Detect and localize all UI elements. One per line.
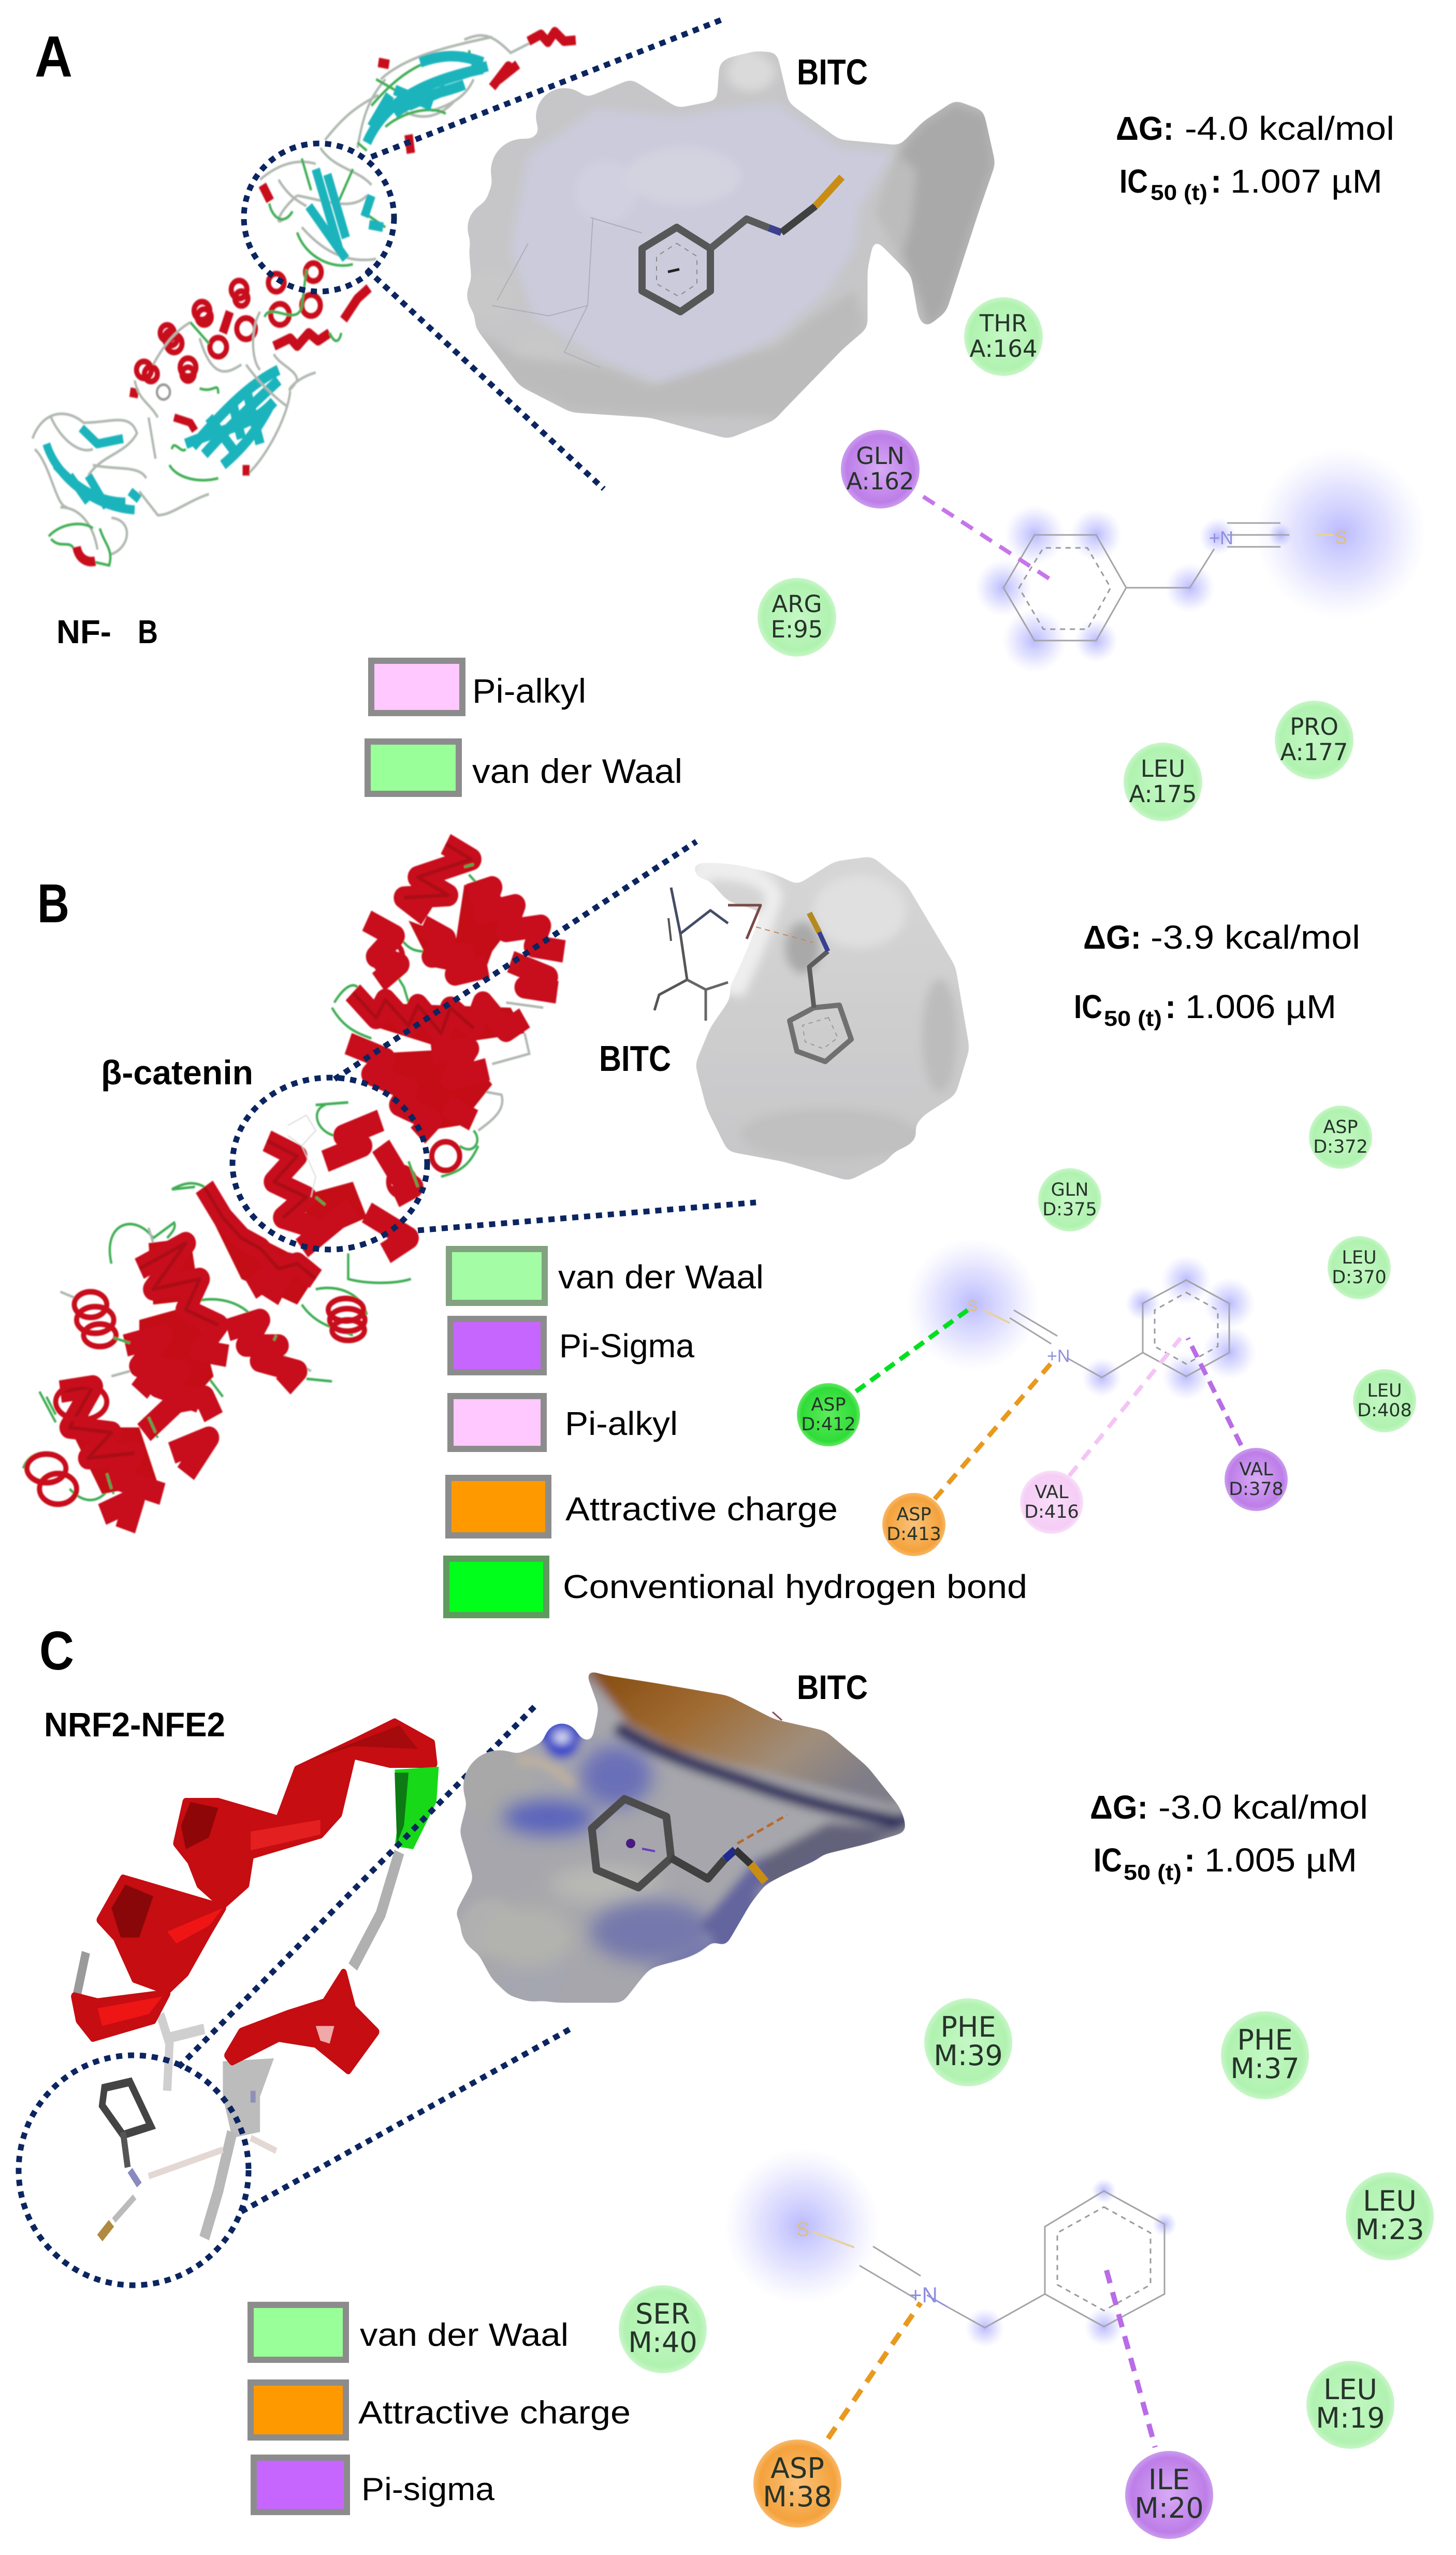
residue LEU M:19: M:19	[1316, 2402, 1385, 2434]
2D ligand interaction diagram	[856, 1238, 1256, 1499]
2D ligand interaction diagram: +N	[1209, 527, 1233, 548]
ligand BITC stick in pocket	[592, 1712, 787, 1888]
residue VAL D:416	[1020, 1471, 1083, 1534]
residue PRO A:177	[1275, 701, 1353, 779]
residue PRO A:177: A:177	[1280, 738, 1348, 766]
residue GLN D:375: D:375	[1042, 1199, 1097, 1220]
residue SER M:40: M:40	[628, 2326, 697, 2359]
residue ASP D:412: D:412	[801, 1414, 856, 1435]
2D ligand interaction diagram: S	[796, 2219, 809, 2241]
legend: Pi-Sigma: Pi-Sigma	[559, 1327, 694, 1364]
residue LEU D:370: LEU	[1342, 1247, 1377, 1268]
residue VAL D:378: VAL	[1239, 1459, 1273, 1480]
label beta-catenin: β-catenin	[101, 1053, 253, 1092]
label NF-kB: NF-	[56, 613, 111, 650]
residue PRO A:177: PRO	[1290, 713, 1338, 741]
protein: NF-kB ribbon structure	[33, 32, 576, 565]
IC50 label: 50 (t)	[1151, 180, 1207, 205]
zoom guide line lower	[367, 269, 604, 489]
binding energy label: -4.0 kcal/mol	[1185, 110, 1394, 147]
zoom guide line lower	[241, 2027, 573, 2212]
dashed zoom circle	[19, 2055, 249, 2285]
panel letter B: B	[37, 873, 69, 934]
legend: van der Waal	[449, 1249, 764, 1303]
residue THR A:164	[964, 297, 1043, 376]
legend: van der Waal: van der Waal	[360, 2317, 569, 2353]
legend: Pi-alkyl: Pi-alkyl	[565, 1405, 678, 1442]
residue ASP M:38: M:38	[763, 2480, 832, 2513]
residue SER M:40: SER	[635, 2298, 690, 2330]
panel C: NRF2-NFE2 docking	[19, 1620, 1434, 2539]
zoom guide line lower	[418, 1202, 756, 1230]
binding energy label: ΔG:	[1083, 919, 1141, 956]
IC50 label: :	[1184, 1841, 1195, 1879]
panel letter A: A	[35, 24, 72, 89]
zoom guide line upper	[334, 841, 696, 1079]
residue GLN A:162	[841, 430, 920, 509]
binding energy label	[1116, 110, 1394, 147]
residue LEU M:19: LEU	[1323, 2373, 1377, 2406]
label BITC: BITC	[797, 52, 868, 92]
residue LEU D:408: D:408	[1357, 1400, 1412, 1421]
residue ASP D:413: D:413	[886, 1524, 941, 1545]
residue GLN A:162: GLN	[856, 442, 905, 470]
residue LEU D:408	[1353, 1369, 1416, 1432]
IC50 label: 50 (t)	[1124, 1860, 1182, 1884]
IC50 label	[1074, 988, 1336, 1030]
IC50 label: 50 (t)	[1104, 1006, 1162, 1030]
2D ligand interaction diagram	[923, 448, 1426, 673]
2D ligand interaction diagram: S	[1335, 527, 1347, 548]
residue ARG E:95: E:95	[771, 616, 823, 643]
label NF-kB: B	[138, 613, 158, 650]
residue GLN D:375	[1038, 1168, 1101, 1231]
binding energy label: -3.0 kcal/mol	[1158, 1789, 1368, 1826]
legend: Pi-sigma	[254, 2458, 495, 2512]
legend: Attractive charge: Attractive charge	[565, 1490, 838, 1528]
dashed zoom circle	[244, 143, 394, 292]
panel A: NF-kB docking	[33, 19, 1426, 821]
residue ASP D:413: ASP	[896, 1504, 931, 1525]
residue LEU A:175: LEU	[1141, 755, 1185, 782]
residue ASP D:413	[882, 1493, 945, 1556]
residue VAL D:416: VAL	[1035, 1482, 1069, 1503]
IC50 label: :	[1165, 988, 1176, 1025]
residue GLN A:162: A:162	[846, 468, 914, 495]
legend: Pi-sigma: Pi-sigma	[361, 2472, 495, 2507]
binding pocket surface	[687, 856, 969, 1181]
label NF-kB	[56, 613, 158, 650]
legend: Pi-alkyl: Pi-alkyl	[472, 672, 586, 710]
legend: Attractive charge: Attractive charge	[358, 2395, 631, 2431]
legend: van der Waal	[251, 2305, 569, 2360]
IC50 label: 1.007 µM	[1230, 163, 1382, 200]
binding energy label	[1083, 919, 1360, 956]
label NRF2-NFE2: NRF2-NFE2	[44, 1705, 225, 1744]
residue ASP D:372: D:372	[1313, 1137, 1368, 1157]
residue ASP M:38: ASP	[770, 2452, 824, 2485]
legend: van der Waal	[368, 742, 682, 794]
2D ligand interaction diagram	[724, 2148, 1177, 2447]
IC50 label: 1.006 µM	[1185, 988, 1336, 1025]
legend: Pi-alkyl	[371, 661, 586, 713]
residue PHE M:37	[1221, 2011, 1309, 2099]
legend: Attractive charge	[448, 1478, 838, 1535]
residue VAL D:378	[1225, 1448, 1288, 1511]
residue ARG E:95	[758, 578, 836, 657]
ligand BITC with wireframe residue	[654, 888, 851, 1062]
residue LEU M:23: LEU	[1363, 2185, 1417, 2217]
residue SER M:40	[619, 2285, 707, 2373]
legend: Conventional hydrogen bond	[446, 1559, 1027, 1615]
legend: van der Waal: van der Waal	[558, 1258, 764, 1296]
dashed zoom ellipse	[232, 1078, 427, 1250]
IC50 label	[1094, 1841, 1357, 1884]
residue PHE M:37: M:37	[1230, 2052, 1300, 2085]
2D ligand interaction diagram: S	[967, 1298, 978, 1315]
residue ILE M:20: M:20	[1134, 2492, 1204, 2524]
residue THR A:164: THR	[979, 310, 1027, 337]
residue LEU M:23	[1346, 2172, 1434, 2260]
zoom guide line upper	[371, 19, 724, 157]
label BITC: BITC	[599, 1038, 671, 1079]
residue ILE M:20	[1125, 2451, 1213, 2539]
legend: Pi-alkyl	[450, 1396, 678, 1449]
residue LEU M:19	[1306, 2361, 1394, 2449]
IC50 label: IC	[1094, 1841, 1122, 1879]
legend: van der Waal: van der Waal	[472, 752, 682, 790]
zoom guide line upper	[179, 1705, 536, 2067]
residue PHE M:39	[924, 1998, 1012, 2086]
panel letter C: C	[39, 1620, 74, 1681]
residue PHE M:37: PHE	[1237, 2024, 1293, 2056]
faint wireframe in pocket	[492, 217, 642, 368]
binding energy label	[1090, 1789, 1368, 1826]
ligand BITC stick in pocket	[642, 177, 842, 312]
2D ligand interaction diagram: +N	[1047, 1346, 1070, 1366]
residue LEU M:23: M:23	[1355, 2213, 1424, 2246]
protein: NRF2-NFE2 ribbon with docked ligand	[74, 1722, 439, 2238]
2D ligand interaction diagram: +N	[909, 2283, 938, 2307]
binding energy label: ΔG:	[1090, 1789, 1148, 1826]
residue ASP M:38	[753, 2440, 841, 2528]
binding energy label: ΔG:	[1116, 110, 1174, 147]
legend: Attractive charge	[251, 2383, 631, 2437]
residue LEU A:175	[1124, 743, 1202, 821]
IC50 label	[1119, 163, 1382, 205]
residue ASP D:372	[1309, 1106, 1372, 1169]
binding energy label: -3.9 kcal/mol	[1151, 919, 1360, 956]
residue VAL D:378: D:378	[1229, 1479, 1284, 1500]
residue PHE M:39: M:39	[934, 2039, 1003, 2072]
IC50 label: :	[1211, 163, 1221, 200]
electrostatic binding pocket surface	[455, 1670, 907, 2002]
protein: beta-catenin ribbon structure	[23, 844, 564, 1530]
IC50 label: IC	[1119, 163, 1148, 200]
residue LEU D:408: LEU	[1367, 1381, 1402, 1401]
residue GLN D:375: GLN	[1051, 1180, 1088, 1200]
residue ASP D:372: ASP	[1323, 1117, 1358, 1138]
IC50 label: 1.005 µM	[1204, 1841, 1357, 1879]
residue ASP D:412: ASP	[811, 1395, 846, 1415]
residue THR A:164: A:164	[969, 335, 1038, 362]
label BITC: BITC	[797, 1668, 868, 1706]
residue PHE M:39: PHE	[940, 2011, 996, 2043]
binding pocket surface	[467, 51, 995, 439]
residue ARG E:95: ARG	[772, 590, 822, 618]
residue VAL D:416: D:416	[1024, 1502, 1079, 1522]
IC50 label: IC	[1074, 988, 1102, 1025]
residue ASP D:412	[797, 1383, 860, 1446]
panel B: beta-catenin docking	[23, 841, 1416, 1615]
legend: Pi-Sigma	[450, 1319, 694, 1372]
legend: Conventional hydrogen bond: Conventional hydrogen bond	[563, 1568, 1027, 1605]
residue LEU D:370: D:370	[1332, 1267, 1387, 1288]
residue ILE M:20: ILE	[1148, 2463, 1190, 2496]
residue LEU D:370	[1328, 1236, 1391, 1299]
residue LEU A:175: A:175	[1129, 780, 1197, 808]
